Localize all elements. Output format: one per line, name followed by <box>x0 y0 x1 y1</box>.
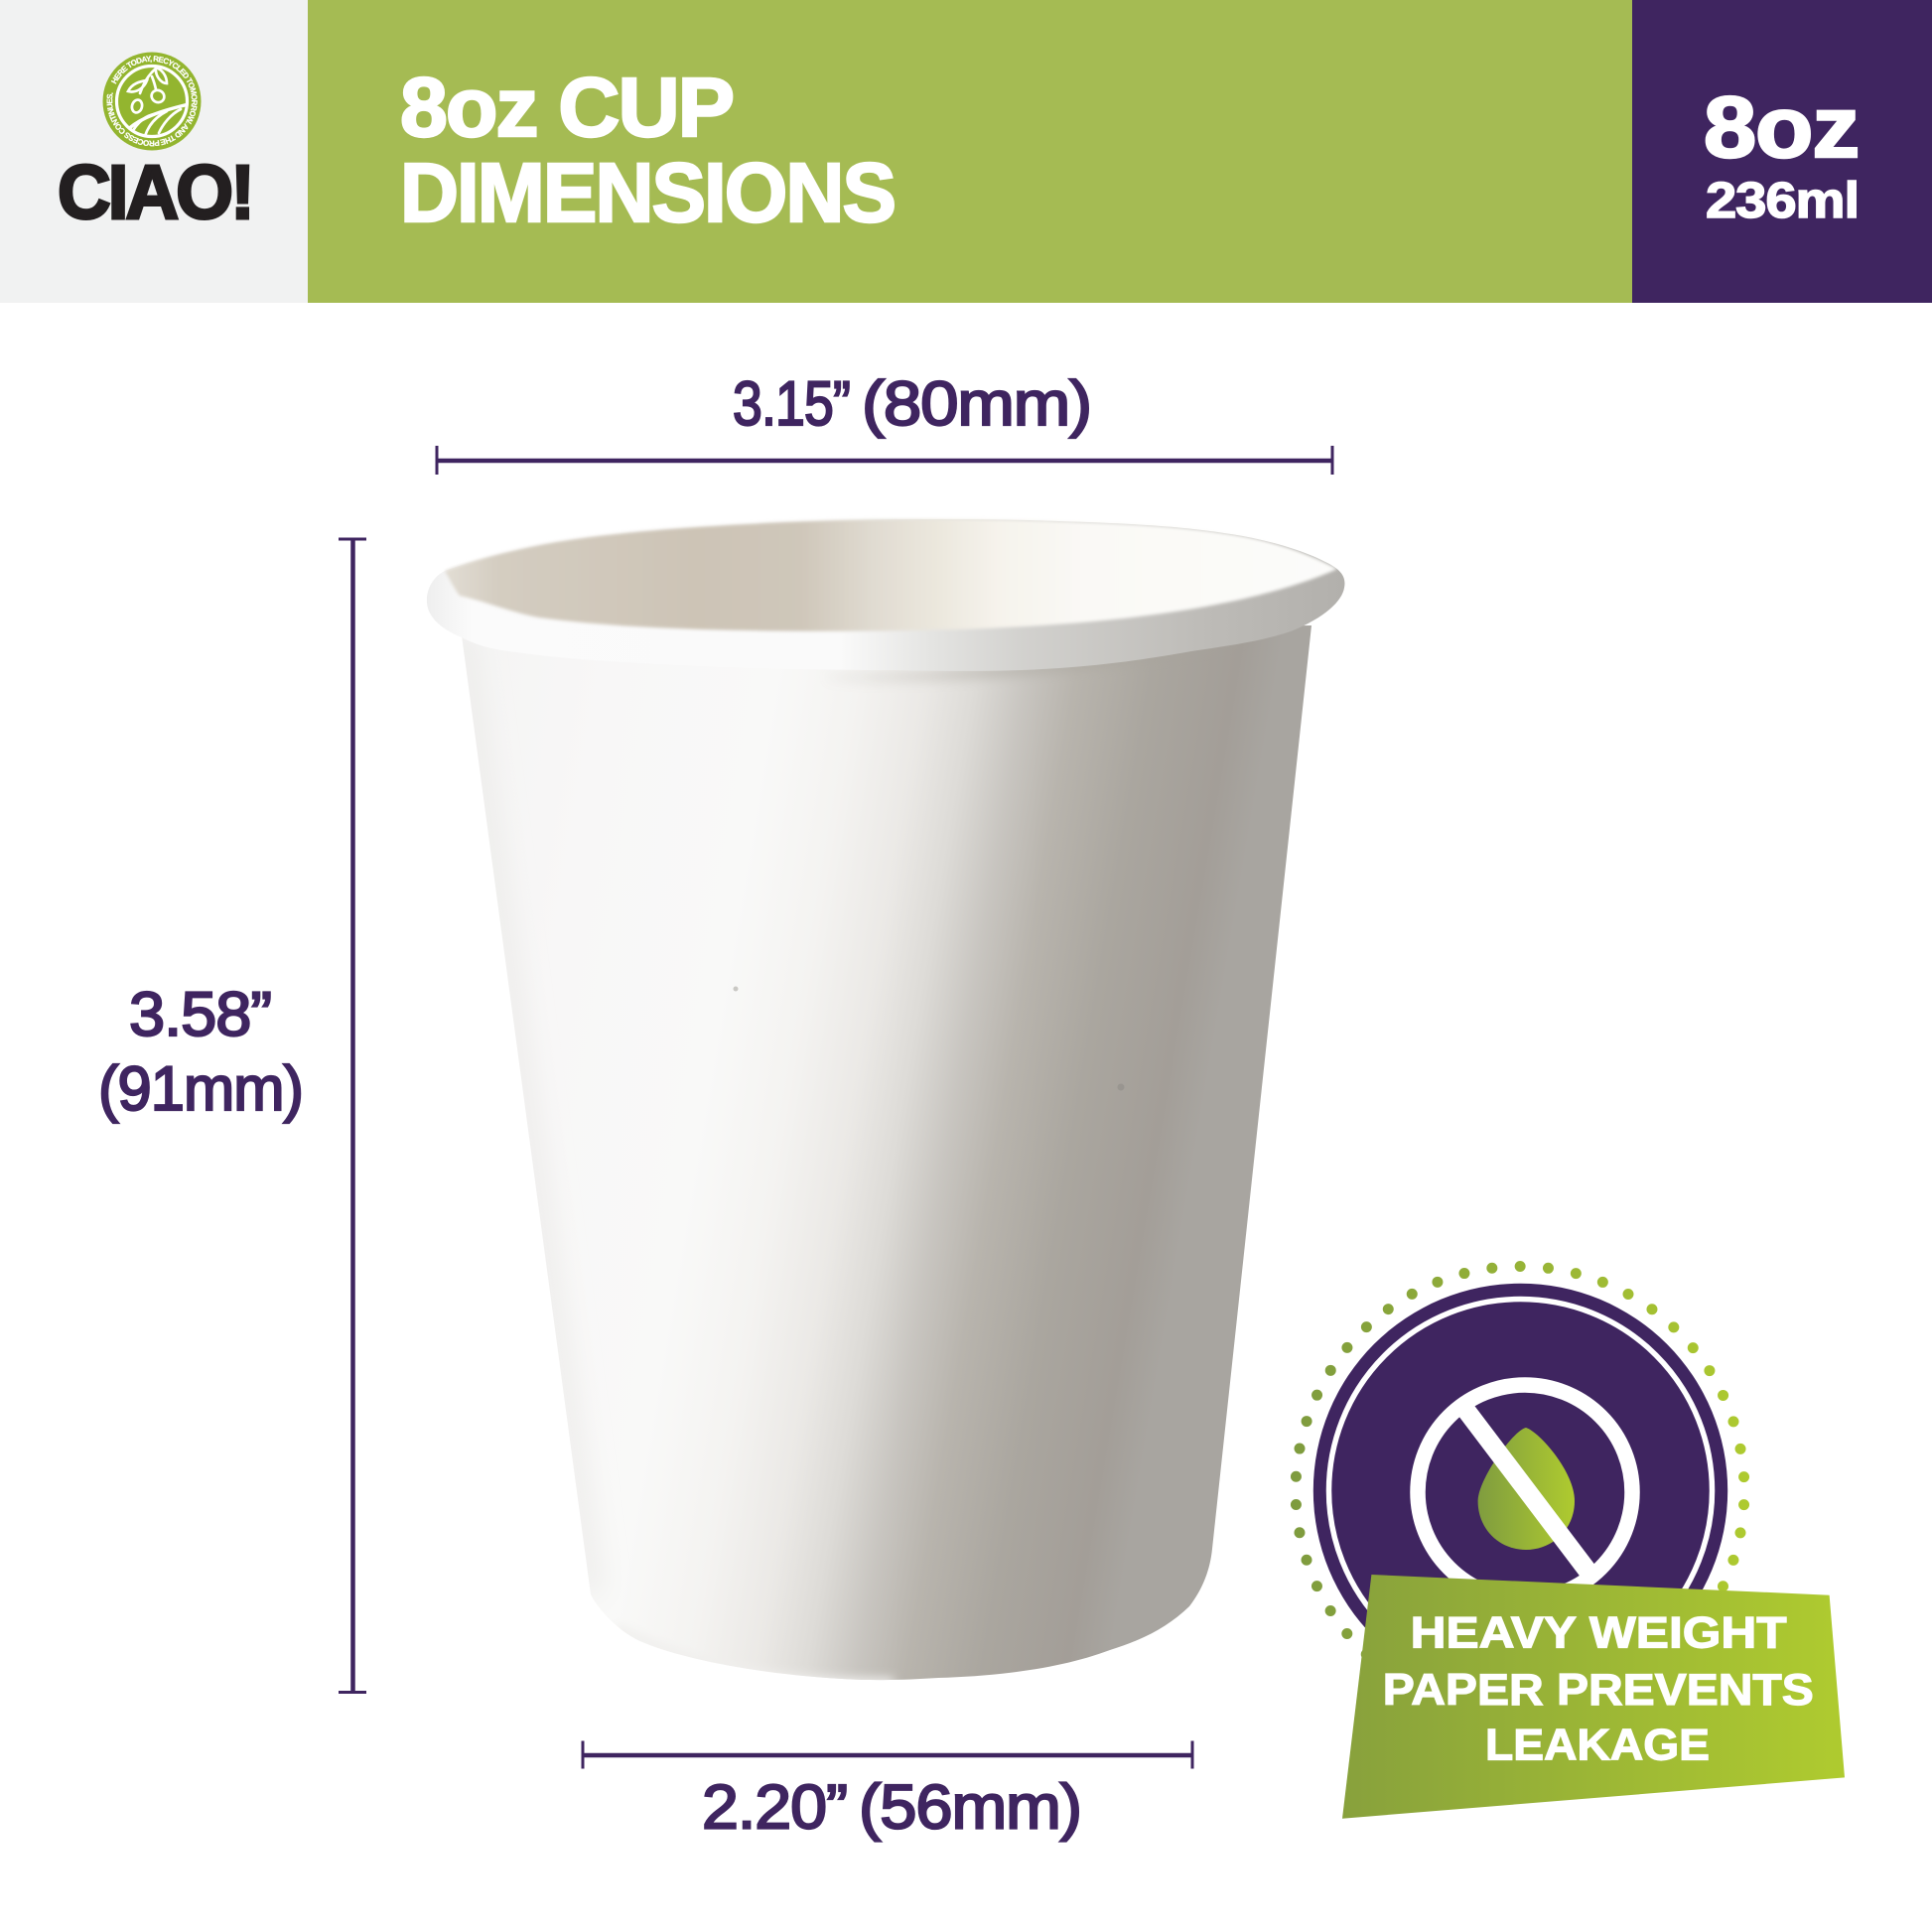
icon: prohibition sign <box>1418 1385 1632 1599</box>
base width label: (56mm) <box>859 1773 1081 1843</box>
title line 1: 8oz CUP <box>400 61 733 154</box>
inner white ring <box>1328 1299 1712 1682</box>
header band <box>0 0 1932 303</box>
banner text: PAPER PREVENTS <box>1383 1666 1814 1715</box>
cup body <box>462 625 1311 1683</box>
purple disc <box>1313 1284 1727 1698</box>
capacity in millilitres: 236ml <box>1706 172 1859 228</box>
height label: 3.58” <box>129 980 271 1049</box>
height label: (91mm) <box>98 1054 303 1124</box>
base width label <box>702 1773 1081 1843</box>
title panel <box>308 0 1632 303</box>
banner text: LEAKAGE <box>1485 1721 1710 1769</box>
logo wordmark: CIAO! <box>58 150 252 235</box>
capacity in ounces: 8oz <box>1704 79 1859 176</box>
top width label: 3.15” <box>733 369 850 439</box>
banner text <box>1383 1608 1814 1769</box>
height line <box>339 538 366 1693</box>
base width line <box>583 1741 1192 1769</box>
top width line <box>437 446 1332 475</box>
dimension: top width <box>437 369 1332 475</box>
icon: water drop <box>1478 1428 1575 1550</box>
height label <box>98 980 303 1124</box>
title line 2: DIMENSIONS <box>400 146 895 239</box>
green banner <box>1342 1575 1845 1819</box>
base width label: 2.20” <box>702 1773 847 1843</box>
capacity panel <box>1632 0 1932 303</box>
cup rim <box>427 519 1344 671</box>
logo panel <box>0 0 308 303</box>
dotted ring <box>1296 1267 1744 1716</box>
paper cup <box>427 519 1344 1683</box>
dimension: height <box>98 538 366 1693</box>
dimension: base width <box>583 1741 1192 1843</box>
top width label: (80mm) <box>862 369 1091 439</box>
icon: recycled seal logo: HERE TODAY, RECYCLED TOMORROW. AND THE PROCESS CONTINUES. <box>107 56 198 147</box>
cup interior <box>445 519 1337 631</box>
banner text: HEAVY WEIGHT <box>1411 1608 1787 1658</box>
top width label <box>733 369 1091 439</box>
leakage badge <box>1296 1267 1845 1819</box>
